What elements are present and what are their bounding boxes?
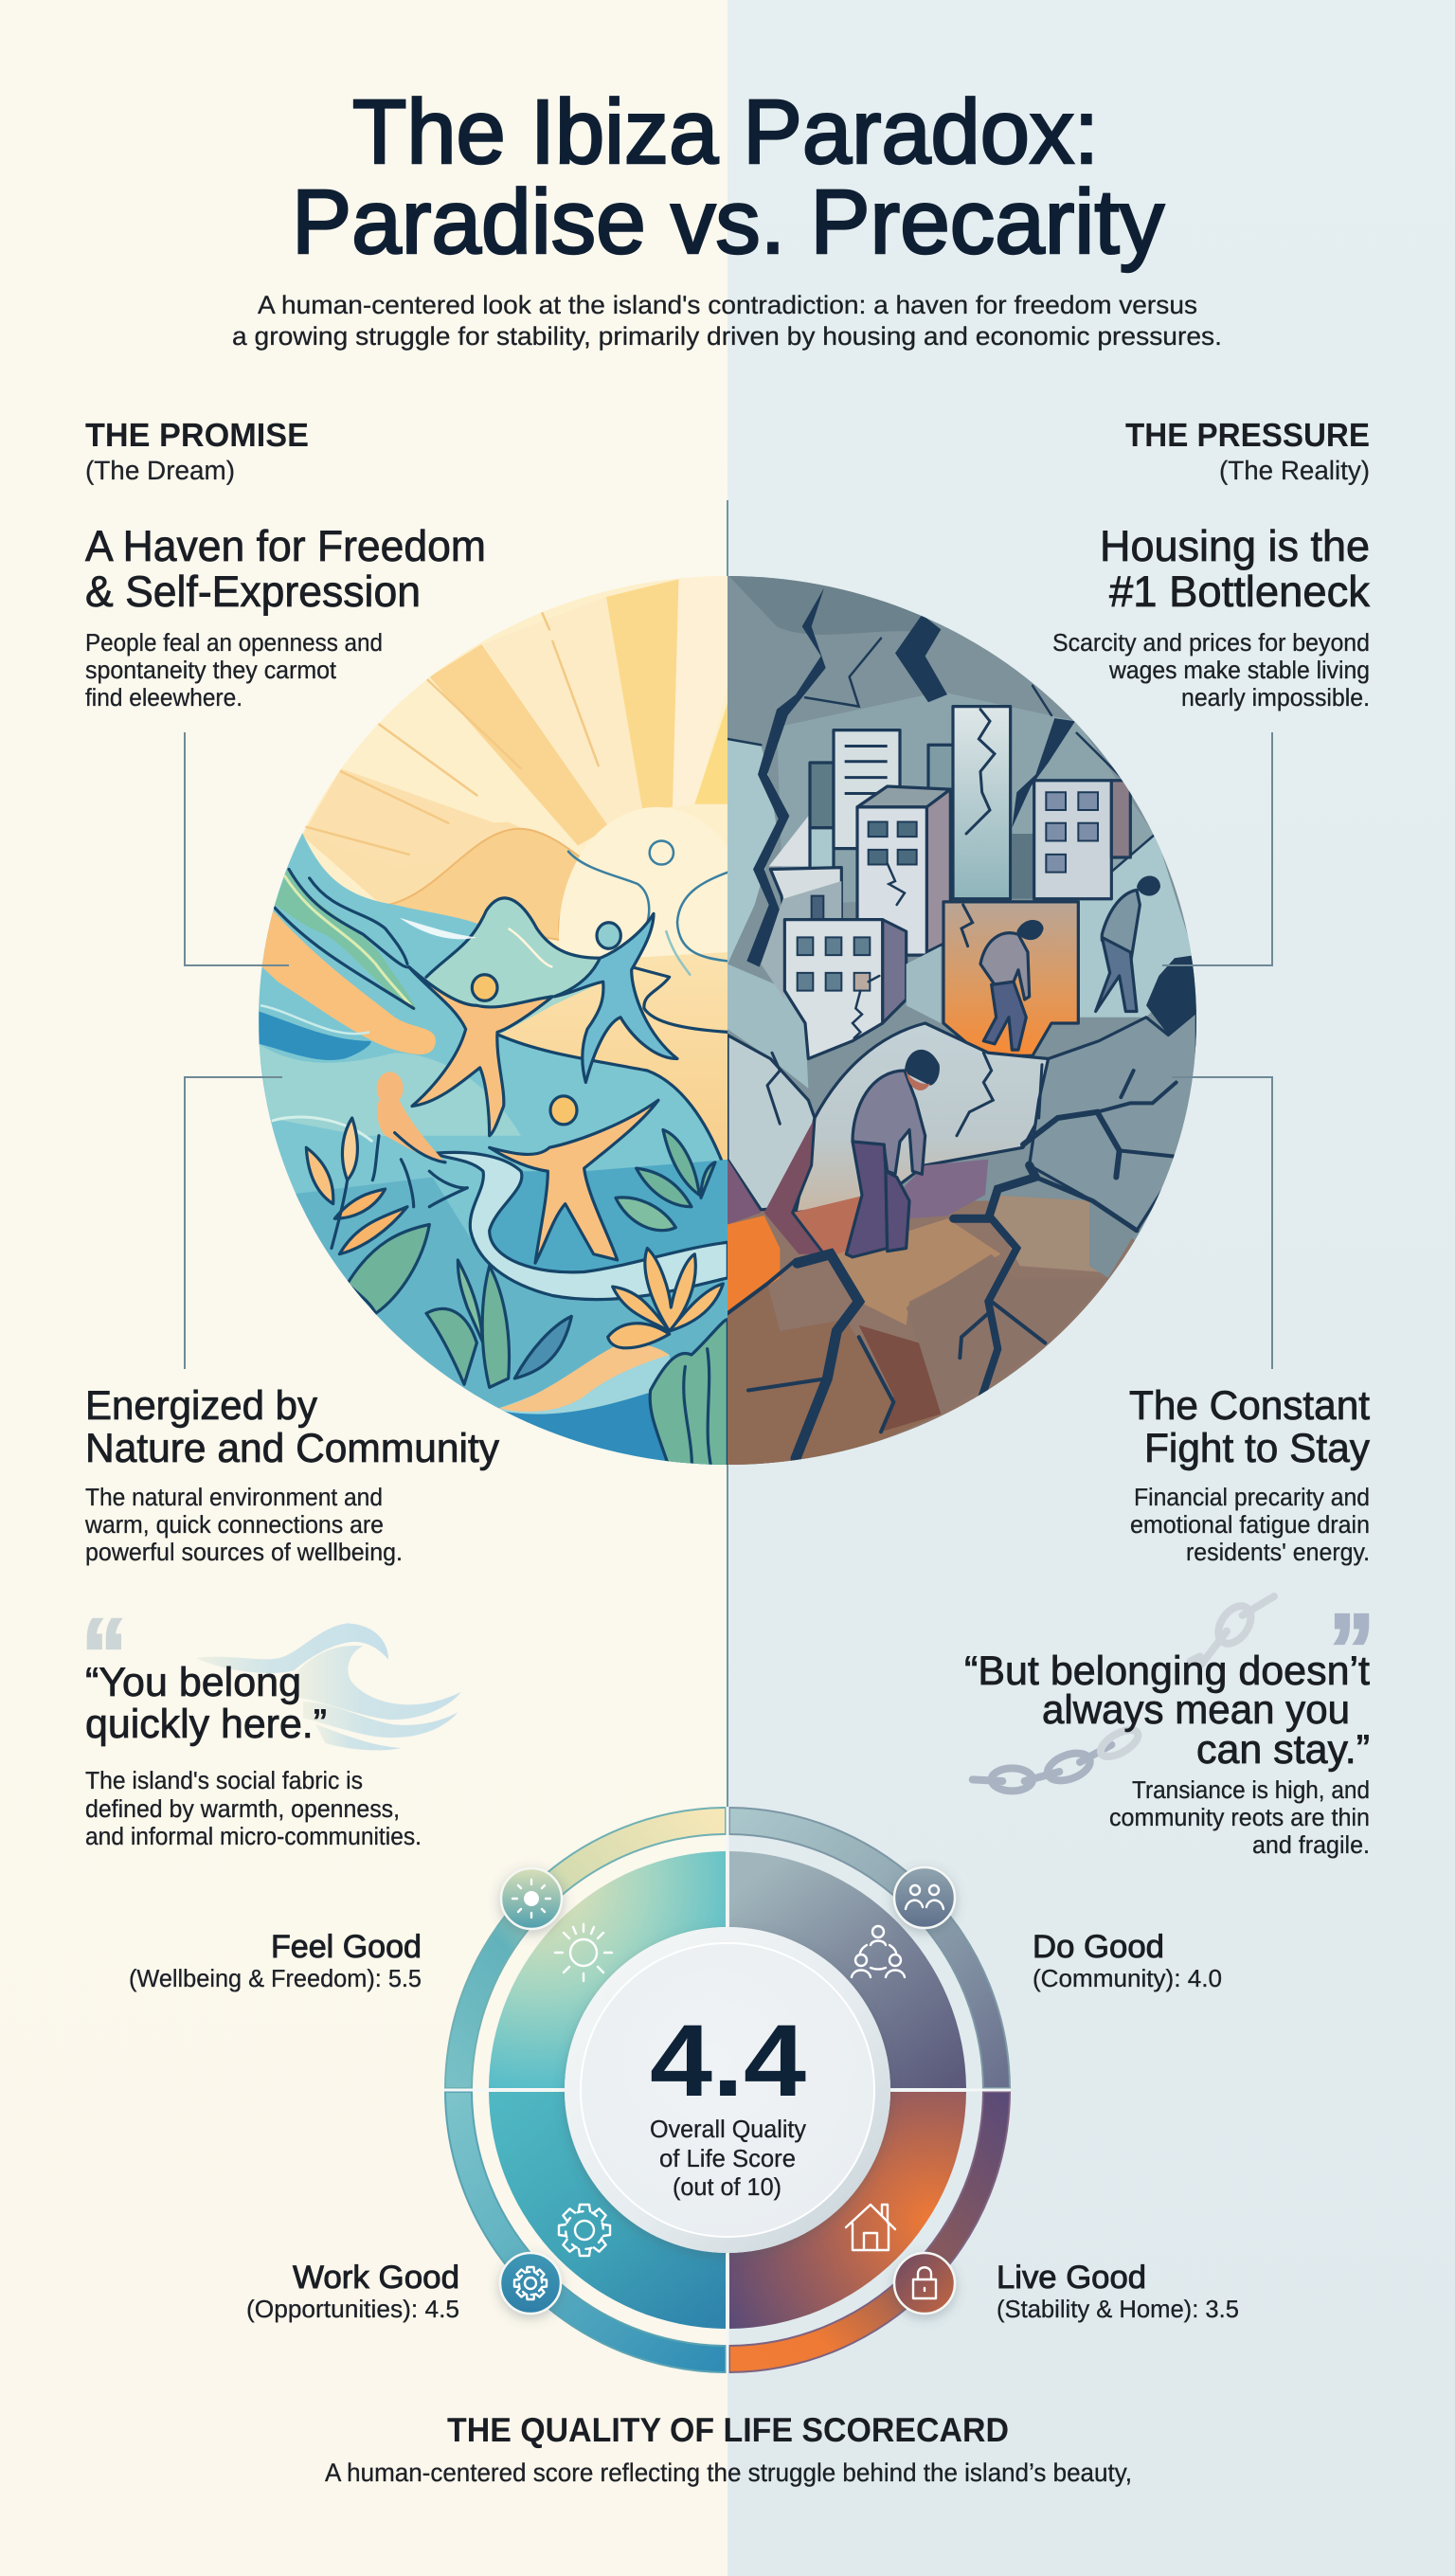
section header: the promise: (The Dream) — [85, 456, 235, 485]
text block: housing is the bottleneck: #1 Bottleneck — [1109, 567, 1371, 616]
callout connector: haven for freedom — [185, 732, 289, 965]
label: feel good — [129, 1929, 422, 1992]
badge: people — [894, 1867, 955, 1928]
icon: gear in segment — [558, 2204, 611, 2257]
overall score: 4.4 — [650, 2003, 806, 2117]
text block: a haven for freedom: A Haven for Freedom — [85, 521, 486, 570]
icon: broken chain decoration — [973, 1596, 1274, 1791]
icon: wave decoration — [196, 1623, 461, 1750]
quote: you belong quickly here — [85, 1660, 327, 1747]
callout connector: housing bottleneck — [1162, 732, 1272, 965]
text block: housing is the bottleneck: Housing is the — [1100, 521, 1370, 570]
text block: the constant fight to stay: Fight to Stay — [1144, 1426, 1370, 1471]
label: work good — [246, 2260, 459, 2323]
title — [292, 81, 1164, 273]
text block: the constant fight to stay — [1129, 1383, 1370, 1566]
section header: the promise: THE PROMISE — [85, 417, 309, 454]
icon: opening quote mark: “ — [81, 1597, 127, 1711]
text block: the constant fight to stay: emotional fatigue drain — [1130, 1510, 1370, 1539]
outer ring segments — [445, 1808, 1010, 2372]
text block: energized by nature — [84, 1383, 499, 1566]
text block: a haven for freedom: People feal an openness and — [85, 628, 383, 657]
score caption: Overall Quality — [650, 2115, 806, 2143]
label: live good: (Stability & Home): 3.5 — [997, 2295, 1239, 2323]
title: The Ibiza Paradox: — [352, 81, 1099, 183]
text block: social fabric: defined by warmth, openness, — [85, 1794, 400, 1823]
text block: housing is the bottleneck: nearly impossible. — [1181, 683, 1370, 712]
text block: social fabric: The island's social fabric is — [85, 1766, 363, 1794]
text block: transiance: and fragile. — [1252, 1830, 1370, 1859]
chart: quality of life radial scorecard — [445, 1808, 1010, 2372]
text block: transiance — [1109, 1775, 1370, 1859]
text block: a haven for freedom: & Self-Expression — [85, 567, 421, 616]
text block: the constant fight to stay: residents' energy. — [1186, 1538, 1370, 1566]
inner quadrant segments — [489, 1851, 966, 2329]
subtitle: A human-centered look at the island's contradiction: a haven for freedom versus — [258, 291, 1197, 319]
quote: but belonging does not mean you can stay: can stay.” — [1196, 1727, 1370, 1773]
score caption — [650, 2115, 806, 2201]
illustration: the reality half of the circle — [720, 549, 1212, 1478]
label: work good: (Opportunities): 4.5 — [246, 2295, 459, 2323]
badge: gear — [500, 2253, 561, 2314]
title: Paradise vs. Precarity — [292, 171, 1164, 273]
center disc — [565, 1927, 890, 2253]
label: work good: Work Good — [293, 2260, 459, 2296]
text block: housing is the bottleneck: Scarcity and prices for beyond — [1052, 628, 1370, 657]
text block: transiance: community reots are thin — [1109, 1803, 1370, 1831]
quote: but belonging does not mean you can stay — [964, 1648, 1370, 1773]
score caption: (out of 10) — [673, 2172, 781, 2201]
quote: you belong quickly here: “You belong — [85, 1660, 301, 1705]
label: do good: Do Good — [1033, 1929, 1164, 1965]
text block: housing is the bottleneck — [1052, 521, 1371, 712]
illustration: the dream half of the circle — [259, 576, 728, 1465]
label: do good — [1033, 1929, 1222, 1992]
text block: energized by nature: Nature and Community — [85, 1426, 499, 1471]
icon: closing quote mark: ” — [1329, 1593, 1374, 1706]
text block: social fabric — [85, 1766, 422, 1850]
text block: energized by nature: powerful sources of wellbeing. — [85, 1538, 403, 1566]
text block: a haven for freedom: spontaneity they carmot — [85, 656, 337, 684]
text block: energized by nature: warm, quick connections are — [84, 1510, 384, 1539]
icon: house in segment — [846, 2205, 895, 2250]
callout connector: energized by nature — [185, 1077, 282, 1369]
text block: transiance: Transiance is high, and — [1132, 1775, 1370, 1804]
icon: sun in segment — [555, 1924, 612, 1981]
section header: the promise — [85, 417, 309, 485]
scorecard heading: THE QUALITY OF LIFE SCORECARD — [447, 2410, 1009, 2449]
quadrant separators — [444, 1807, 1011, 2373]
quote: but belonging does not mean you can stay: always mean you — [1042, 1687, 1350, 1733]
section header: the pressure: THE PRESSURE — [1125, 417, 1370, 454]
label: live good — [997, 2260, 1239, 2323]
subtitle: a growing struggle for stability, primarily driven by housing and economic pressures. — [232, 322, 1222, 351]
section header: the pressure: (The Reality) — [1219, 456, 1370, 485]
text block: the constant fight to stay: The Constant — [1129, 1383, 1370, 1429]
quote: but belonging does not mean you can stay: “But belonging doesn’t — [964, 1648, 1370, 1694]
label: live good: Live Good — [997, 2260, 1146, 2296]
score caption: of Life Score — [659, 2144, 796, 2172]
text block: energized by nature: The natural environment and — [85, 1483, 383, 1511]
label: do good: (Community): 4.0 — [1033, 1964, 1222, 1992]
text block: social fabric: and informal micro-communities. — [85, 1822, 422, 1850]
badge: lock — [894, 2253, 955, 2314]
section header: the pressure — [1125, 417, 1370, 485]
central divider line — [727, 500, 728, 1810]
text block: a haven for freedom: find eleewhere. — [85, 683, 242, 712]
label: feel good: (Wellbeing & Freedom): 5.5 — [129, 1964, 422, 1992]
subtitle — [232, 291, 1222, 351]
scorecard caption: A human-centered score reflecting the struggle behind the island’s beauty, — [325, 2459, 1132, 2487]
callout connector: fight to stay — [1172, 1077, 1272, 1369]
quote: you belong quickly here: quickly here.” — [85, 1702, 327, 1747]
label: feel good: Feel Good — [271, 1929, 422, 1965]
text block: energized by nature: Energized by — [85, 1383, 317, 1429]
badge: sun — [501, 1868, 562, 1929]
icon: community in segment — [852, 1926, 905, 1977]
text block: housing is the bottleneck: wages make stable living — [1108, 656, 1370, 684]
text block: the constant fight to stay: Financial precarity and — [1134, 1483, 1370, 1511]
text block: a haven for freedom — [85, 521, 486, 712]
